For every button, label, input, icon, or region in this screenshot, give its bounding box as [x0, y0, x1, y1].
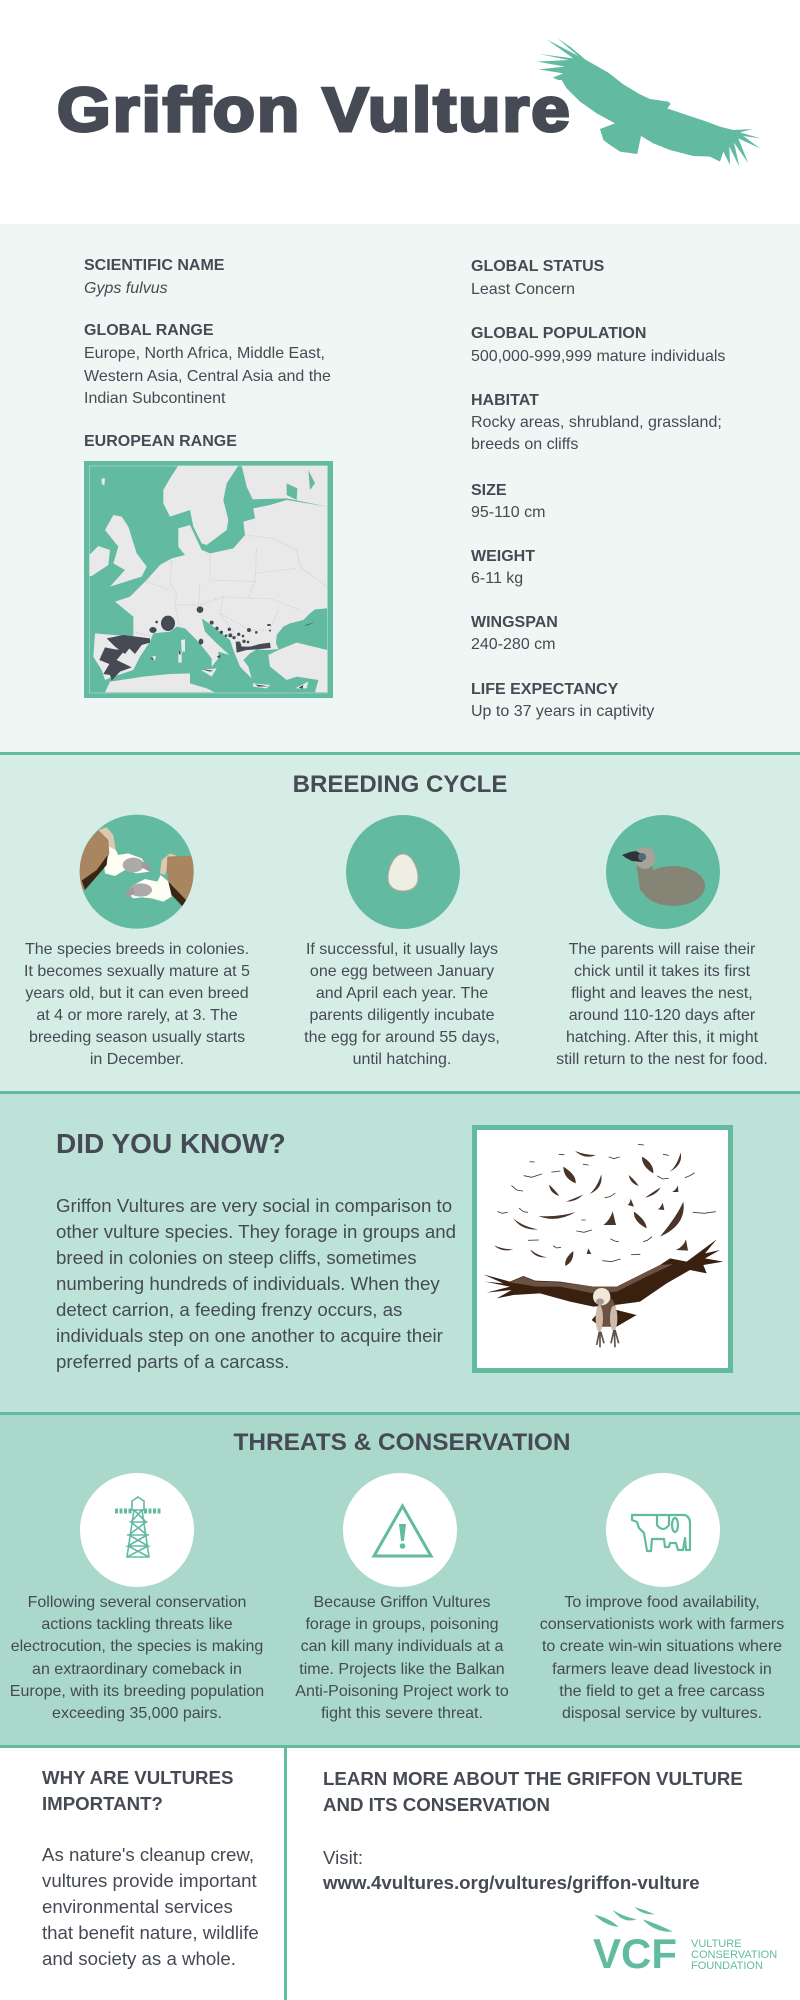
right facts column: HABITAT — [471, 392, 539, 409]
text: poisoning — [295, 1594, 509, 1722]
left facts column: Western Asia, Central Asia and the — [84, 368, 331, 385]
panel: why vultures are important: As nature's cleanup crew, — [42, 1844, 254, 1865]
panel: learn more: LEARN MORE ABOUT THE GRIFFON VULTURE — [323, 1768, 743, 1789]
text: poisoning: fight this severe threat. — [321, 1705, 483, 1722]
icon: soaring vulture silhouette — [537, 38, 761, 167]
text: social behaviour — [56, 1195, 456, 1372]
logo: Vulture Conservation Foundation: FOUNDATION — [691, 1960, 763, 1972]
left facts column: SCIENTIFIC NAME — [84, 257, 225, 274]
text: poisoning: Anti-Poisoning Project work to — [295, 1683, 509, 1700]
text: social behaviour: other vulture species. They forage in groups and — [56, 1221, 456, 1242]
flock of small vultures — [494, 1144, 715, 1266]
text: food availability: the field to get a free carcass — [559, 1683, 765, 1700]
icon: two adult vultures — [77, 815, 197, 929]
heading: did you know: DID YOU KNOW? — [56, 1128, 286, 1159]
icon: egg — [346, 815, 460, 929]
text: electrocution: actions tackling threats like — [41, 1616, 233, 1633]
logo: Vulture Conservation Foundation: VULTURE — [691, 1938, 742, 1950]
icon: vulture chick — [606, 815, 720, 929]
text: chick — [556, 941, 768, 1068]
text: colonies: It becomes sexually mature at 5 — [24, 963, 250, 980]
logo: Vulture Conservation Foundation: VCF — [593, 1930, 677, 1977]
text: colonies: breeding season usually starts — [29, 1029, 245, 1046]
text: social behaviour: Griffon Vultures are very social in comparison to — [56, 1195, 452, 1216]
panel: did you know — [0, 1091, 800, 1412]
large vulture — [483, 1239, 723, 1347]
panel: learn more: www.4vultures.org/vultures/griffon-vulture — [322, 1872, 700, 1893]
title: Griffon Vulture — [57, 75, 572, 144]
right facts column: Rocky areas, shrubland, grassland; — [471, 414, 722, 431]
icon: cow — [606, 1473, 720, 1587]
text: electrocution: Following several conservation — [28, 1594, 246, 1611]
right facts column: WINGSPAN — [471, 614, 558, 631]
right facts column: WEIGHT — [471, 548, 535, 565]
panel: learn more: AND ITS CONSERVATION — [323, 1794, 550, 1815]
text: electrocution: electrocution, the species is making — [11, 1638, 263, 1655]
panel: why vultures are important: IMPORTANT? — [42, 1793, 163, 1814]
right facts column: breeds on cliffs — [471, 436, 578, 453]
text: colonies: The species breeds in colonies. — [25, 941, 249, 958]
right facts column: 6-11 kg — [471, 570, 523, 587]
text: chick: still return to the nest for food. — [556, 1051, 768, 1068]
panel: why vultures are important — [42, 1767, 259, 1969]
text: colonies — [24, 941, 250, 1068]
right facts column: 500,000-999,999 mature individuals — [471, 348, 725, 365]
text: food availability: conservationists work with farmers — [540, 1616, 784, 1633]
panel: why vultures are important: that benefit nature, wildlife — [42, 1922, 259, 1943]
text: electrocution: Europe, with its breeding population — [10, 1683, 264, 1700]
text: poisoning: time. Projects like the Balkan — [299, 1661, 505, 1678]
panel: why vultures are important: and society as a whole. — [42, 1948, 236, 1969]
map: European range — [84, 461, 333, 698]
text: electrocution — [10, 1594, 264, 1722]
heading: threats and conservation: THREATS & CONSERVATION — [234, 1429, 570, 1456]
panel: why vultures are important: vultures provide important — [42, 1870, 257, 1891]
text: egg: one egg between January — [310, 963, 494, 980]
panel: learn more — [322, 1768, 743, 1893]
text: chick: around 110-120 days after — [569, 1007, 756, 1024]
text: egg: parents diligently incubate — [309, 1007, 495, 1024]
heading: breeding cycle: BREEDING CYCLE — [293, 771, 507, 798]
text: chick: flight and leaves the nest, — [571, 985, 753, 1002]
text: electrocution: an extraordinary comeback in — [32, 1661, 242, 1678]
right facts column: Up to 37 years in captivity — [471, 703, 654, 720]
icon: electricity pylon — [80, 1473, 194, 1587]
left facts column — [84, 257, 331, 450]
text: egg: and April each year. The — [316, 985, 488, 1002]
text: chick: chick until it takes its first — [574, 963, 751, 980]
right facts column: GLOBAL STATUS — [471, 258, 605, 275]
text: social behaviour: individuals step on one another to acquire their — [56, 1325, 443, 1346]
left facts column: Gyps fulvus — [84, 280, 168, 297]
right facts column: GLOBAL POPULATION — [471, 325, 646, 342]
text: colonies: in December. — [90, 1051, 184, 1068]
right facts column — [471, 258, 725, 720]
text: egg: If successful, it usually lays — [306, 941, 498, 958]
left facts column: EUROPEAN RANGE — [84, 433, 237, 450]
text: colonies: at 4 or more rarely, at 3. The — [36, 1007, 238, 1024]
text: social behaviour: numbering hundreds of individuals. When they — [56, 1273, 440, 1294]
text: poisoning: Because Griffon Vultures — [314, 1594, 490, 1611]
panel: species facts — [0, 224, 800, 752]
text: poisoning: forage in groups, poisoning — [305, 1616, 499, 1633]
left facts column: Indian Subcontinent — [84, 390, 226, 407]
illustration: vulture flock — [474, 1128, 730, 1370]
text: food availability: To improve food availability, — [564, 1594, 760, 1611]
right facts column: LIFE EXPECTANCY — [471, 681, 619, 698]
right facts column: 95-110 cm — [471, 504, 545, 521]
logo: Vulture Conservation Foundation — [593, 1907, 777, 1977]
text: egg: until hatching. — [353, 1051, 451, 1068]
panel: threats and conservation — [0, 1412, 800, 1745]
text: egg — [304, 941, 500, 1068]
text: food availability: farmers leave dead livestock in — [552, 1661, 772, 1678]
text: chick: The parents will raise their — [569, 941, 756, 958]
text: electrocution: exceeding 35,000 pairs. — [52, 1705, 222, 1722]
text: food availability — [540, 1594, 784, 1722]
logo: Vulture Conservation Foundation: CONSERVATION — [691, 1949, 777, 1961]
text: social behaviour: preferred parts of a carcass. — [56, 1351, 289, 1372]
right facts column: 240-280 cm — [471, 636, 556, 653]
text: colonies: years old, but it can even breed — [25, 985, 249, 1002]
panel: learn more: Visit: — [323, 1847, 363, 1868]
text: chick: hatching. After this, it might — [566, 1029, 759, 1046]
icon: warning triangle — [343, 1473, 457, 1587]
right facts column: SIZE — [471, 482, 507, 499]
panel: breeding cycle — [0, 752, 800, 1092]
text: food availability: to create win-win situations where — [542, 1638, 782, 1655]
left facts column: Europe, North Africa, Middle East, — [84, 345, 325, 362]
panel: why vultures are important: environmental services — [42, 1896, 233, 1917]
text: poisoning: can kill many individuals at a — [301, 1638, 503, 1655]
text: social behaviour: breed in colonies on steep cliffs, sometimes — [56, 1247, 417, 1268]
text: social behaviour: detect carrion, a feeding frenzy occurs, as — [56, 1299, 402, 1320]
panel: footer — [0, 1745, 800, 2000]
left facts column: GLOBAL RANGE — [84, 322, 214, 339]
right facts column: Least Concern — [471, 281, 575, 298]
header panel — [0, 0, 800, 224]
panel: why vultures are important: WHY ARE VULTURES — [42, 1767, 233, 1788]
text: food availability: disposal service by vultures. — [562, 1705, 762, 1722]
text: egg: the egg for around 55 days, — [304, 1029, 500, 1046]
